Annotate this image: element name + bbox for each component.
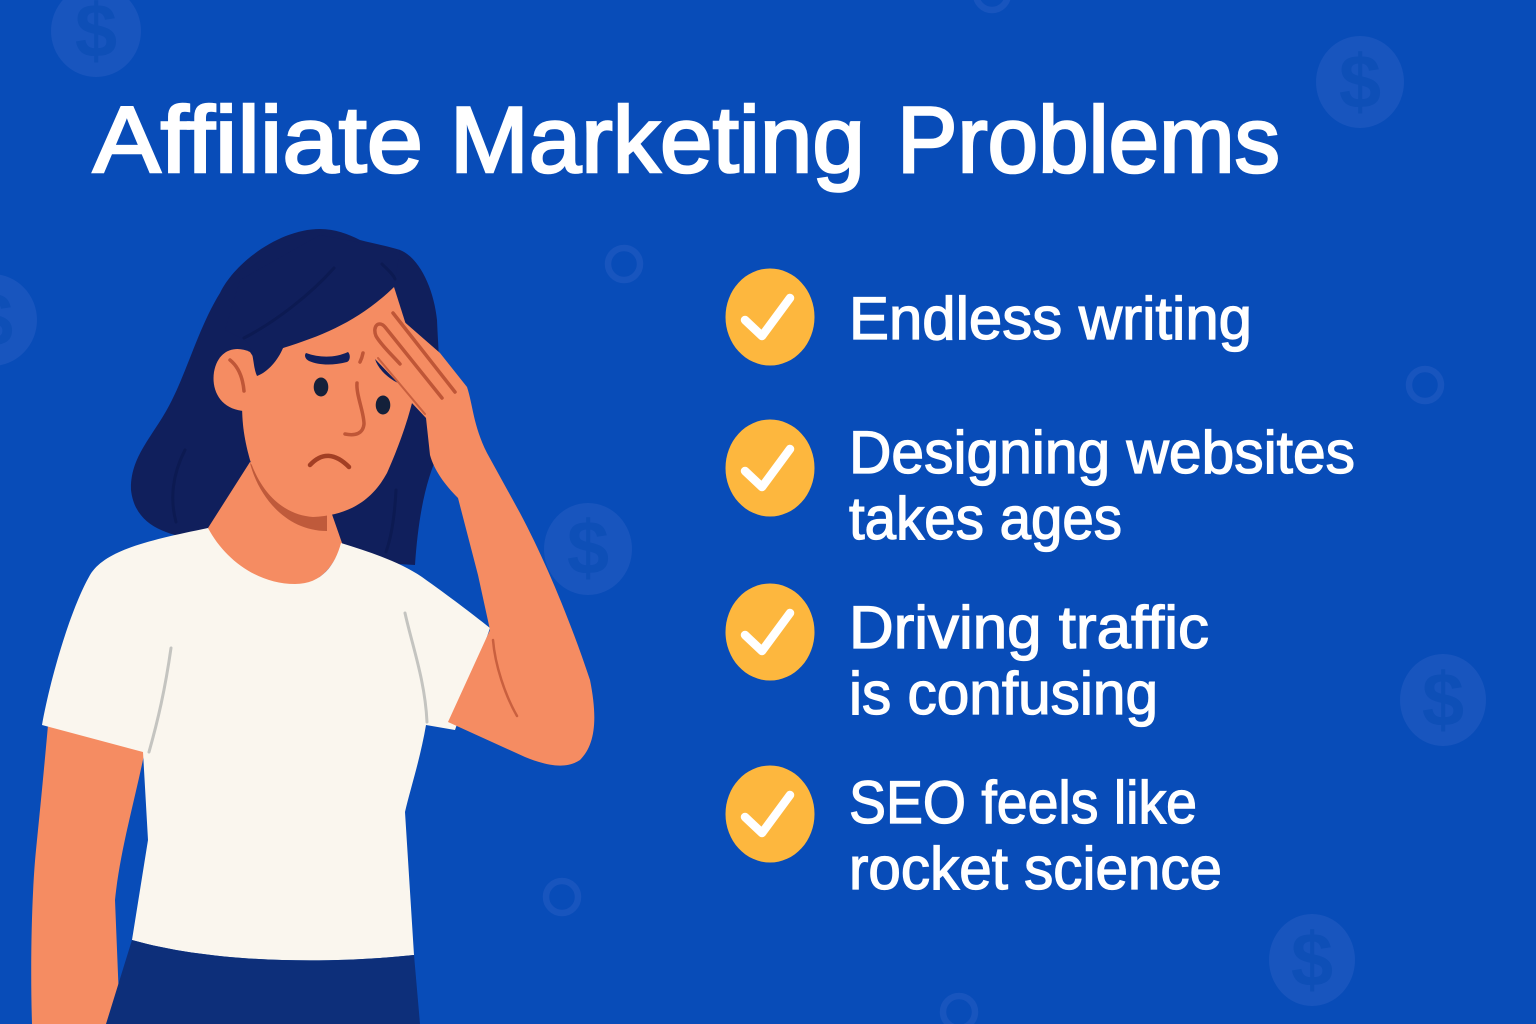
- label: [849, 419, 1355, 552]
- label: Endless writing: [849, 285, 1252, 352]
- eyes: [314, 378, 328, 396]
- hair back: [131, 229, 440, 565]
- label: is confusing: [849, 660, 1158, 727]
- illustration: stressed woman: [31, 229, 594, 1024]
- hair strands: [173, 264, 396, 552]
- label: rocket science: [849, 835, 1222, 902]
- title: Problems: [897, 87, 1280, 192]
- label: takes ages: [849, 485, 1122, 552]
- pants: [106, 940, 420, 1024]
- label: Driving traffic: [849, 594, 1209, 661]
- eyebrow: [305, 352, 350, 365]
- forearm and hand: [375, 312, 594, 766]
- shirt creases: [149, 613, 427, 752]
- background coins and rings: $: [1422, 658, 1464, 743]
- label: SEO feels like: [849, 769, 1197, 836]
- background coins and rings: $: [567, 506, 609, 591]
- background coins and rings: $: [1339, 40, 1381, 125]
- finger lines: [393, 313, 455, 392]
- title: Marketing: [450, 87, 865, 192]
- shadow under hand: [375, 359, 398, 383]
- left arm: [31, 725, 145, 1024]
- face: [242, 287, 414, 517]
- check icon: [726, 268, 814, 366]
- background coins and rings: $: [1291, 918, 1333, 1003]
- arm crease: [493, 640, 517, 716]
- list item: seo: [726, 766, 1222, 902]
- label: [849, 769, 1222, 902]
- title: [93, 87, 1280, 192]
- neck: [208, 462, 342, 585]
- ear: [214, 349, 262, 411]
- list item: driving traffic: [726, 584, 1209, 727]
- check icon: [726, 766, 814, 862]
- neck shadow: [250, 463, 327, 531]
- label: Designing websites: [849, 419, 1355, 486]
- title: Affiliate: [93, 87, 423, 192]
- label: [849, 594, 1209, 727]
- nose and brow crease: [345, 383, 364, 435]
- list item: designing websites: [726, 419, 1355, 552]
- mouth: [310, 456, 349, 467]
- hair front: [225, 235, 400, 376]
- check icon: [726, 420, 814, 516]
- t-shirt: [42, 528, 490, 960]
- check icon: [726, 584, 814, 680]
- list item: endless writing: [726, 268, 1252, 366]
